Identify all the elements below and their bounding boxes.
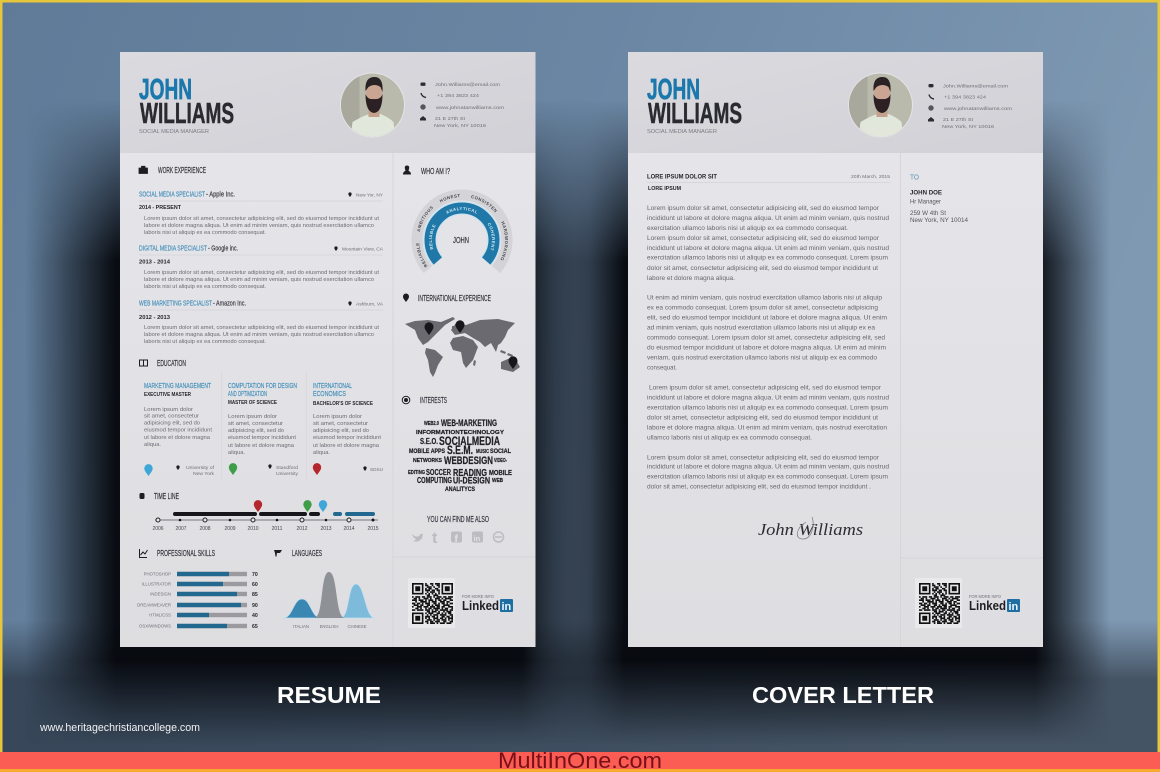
section: education: eiusmod tempor incididunt	[313, 435, 382, 441]
section: timeline: 2009	[224, 526, 236, 532]
name heading: JOHN	[139, 74, 192, 106]
section: professional skills: 65	[252, 624, 258, 630]
letter heading	[647, 174, 890, 192]
section: timeline: 2008	[199, 526, 211, 532]
radial trait diagram: HONEST	[440, 194, 460, 202]
section: work experience: labore et dolore magna aliqua. Ut enim ad minim veniam, quis nostrud exercitation ullamco	[144, 332, 374, 338]
addressee block: 259 W 4th St	[910, 211, 946, 217]
social icons: in	[474, 534, 481, 543]
section: timeline: 2015	[367, 526, 379, 532]
icon: watch	[140, 493, 144, 499]
section: professional skills: OSX/WINDOWS	[139, 624, 171, 628]
section: timeline: 2014	[343, 526, 355, 532]
section: work experience: - Google inc.	[208, 244, 238, 252]
addressee block: New York, NY 10014	[910, 218, 969, 224]
letter body text: elit, sed do eiusmod tempor incididunt ut labore et dolore magna aliqua. Ut enim	[647, 314, 887, 322]
letter body text: Lorem ipsum dolor sit amet, consectetur adipisicing elit, sed do eiusmod tempor	[647, 454, 879, 462]
name heading: JOHN	[647, 74, 700, 106]
word cloud: COMPUTING	[417, 476, 452, 485]
QR code and LinkedIn: FOR MORE INFO	[969, 594, 1002, 599]
section: education: New York	[193, 471, 215, 476]
section: education: ut labore et dolore magna	[313, 443, 379, 449]
word cloud: SOCIAL	[490, 449, 511, 455]
section: education: eiusmod tempor incididunt	[144, 428, 213, 434]
section: work experience: SOCIAL MEDIA SPECIALIST	[139, 190, 205, 198]
letter body text: dolor sit amet, consectetur adipisicing elit, sed do eiusmod tempor incididunt ut	[647, 265, 878, 272]
QR code and LinkedIn: in	[1008, 601, 1019, 613]
name heading: WILLIAMS	[140, 98, 234, 130]
contact details	[928, 84, 1012, 129]
radial trait diagram: CONSISTEN	[471, 195, 498, 212]
contact details	[420, 82, 504, 128]
section: timeline: 2012	[296, 526, 308, 532]
social links: YOU CAN FIND ME ALSO	[427, 515, 489, 524]
section: work experience: - Amazon Inc.	[213, 298, 246, 308]
job title: SOCIAL MEDIA MANAGER	[647, 129, 717, 135]
job title: SOCIAL MEDIA MANAGER	[139, 129, 209, 135]
contact details: New York, NY 10016	[942, 124, 995, 129]
section: work experience: 2012 - 2013	[139, 315, 170, 321]
section: education: University of	[186, 465, 215, 470]
icon: briefcase	[139, 166, 148, 174]
section: work experience: 2013 - 2014	[139, 260, 170, 266]
section: work experience: Lorem ipsum dolor sit amet, consectetur adipisicing elit, sed do eiusmod tempor incididunt ut	[144, 325, 380, 331]
letter body text: ad minim veniam, quis nostrud exercitation ullamco laboris nisi ut aliquip ex ea	[647, 324, 876, 332]
section: professional skills: PROFESSIONAL SKILLS	[157, 549, 215, 558]
word cloud: WEBDESIGN	[444, 455, 493, 467]
section: work experience	[139, 166, 384, 345]
radial trait diagram: COHERENT	[488, 223, 495, 251]
QR code and LinkedIn	[915, 578, 1020, 628]
section: professional skills: DREAMWEAVER	[137, 602, 171, 608]
word cloud: SOCIALMEDIA	[439, 434, 500, 448]
word cloud	[408, 418, 512, 493]
name heading: WILLIAMS	[648, 98, 742, 130]
addressee block: Hr Manager	[910, 198, 942, 206]
section: work experience: 2014 - PRESENT	[139, 205, 182, 211]
portrait photo	[340, 72, 406, 138]
social icons: f	[454, 534, 458, 545]
section: who am I: WHO AM I?	[421, 167, 450, 176]
section: professional skills: HTML/CSS	[149, 612, 171, 618]
section: education: sit amet, consectetur	[313, 421, 368, 427]
letter body text: exercitation ullamco laboris nisi ut aliquip ex ea commodo consequat.	[647, 225, 848, 232]
radial trait diagram: RELIABLE	[429, 224, 436, 250]
social icons: t	[432, 530, 438, 547]
letter body text: Lorem ipsum dolor sit amet, consectetur adipisicing elit, sed do eiusmod tempor	[647, 235, 879, 242]
section: timeline: 2010	[247, 526, 259, 532]
section: education: EXECUTIVE MASTER	[144, 392, 191, 398]
letter body text: exercitation ullamco laboris nisi ut aliquip ex ea commodo consequat. Lorem ipsum	[647, 404, 888, 412]
section: work experience: DIGITAL MEDIA SPECIALIST	[139, 244, 207, 252]
addressee block: JOHN DOE	[910, 190, 943, 196]
section: work experience: New Yor, NY	[356, 192, 383, 198]
section: languages: CHINESE	[347, 624, 367, 629]
icon: flag	[274, 550, 282, 556]
section: professional skills: 40	[252, 613, 258, 619]
section: work experience: laboris nisi ut aliquip ex ea commodo consequat.	[144, 284, 266, 290]
section: work experience: Lorem ipsum dolor sit amet, consectetur adipisicing elit, sed do eiusmod tempor incididunt ut	[144, 270, 380, 276]
letter heading: 20th March, 2015	[851, 174, 890, 179]
website watermark: www.heritagechristiancollege.com	[39, 722, 200, 734]
word cloud: INFORMATIONTECHNOLOGY	[416, 430, 504, 436]
letter body text	[647, 205, 889, 490]
section: languages: ENGLISH	[320, 624, 338, 629]
section: education: sit amet, consectetur	[228, 421, 283, 427]
letter body text: Lorem ipsum dolor sit amet, consectetur adipisicing elit, sed do eiusmod tempor	[647, 205, 879, 212]
section: education: adipisicing elit, sed do	[144, 420, 200, 426]
radial trait diagram: JOHN	[453, 236, 469, 245]
letter body text: veniam, quis nostrud exercitation ullamco laboris nisi ut aliquip ex ea commodo	[647, 354, 878, 362]
section: education: Standford	[276, 465, 298, 470]
QR code and LinkedIn: FOR MORE INFO	[462, 594, 495, 599]
letter body text: exercitation ullamco laboris nisi ut aliquip ex ea commodo consequat. Lorem ipsum	[647, 254, 888, 262]
letter body text: labore et dolore magna aliqua.	[647, 275, 735, 282]
section: work experience: WORK EXPERIENCE	[158, 166, 206, 175]
cover header band	[628, 52, 1043, 153]
section: international experience: INTERNATIONAL EXPERIENCE	[418, 294, 491, 303]
section: work experience: Mountain View, CA	[342, 246, 384, 252]
section: education: ut labore et dolore magna	[144, 435, 210, 441]
section: education: University	[276, 471, 299, 476]
letter body text: incididunt ut labore et dolore magna aliqua. Ut enim ad minim veniam, quis nostrud	[647, 464, 889, 470]
panel: cover letter page	[628, 52, 1043, 647]
section: interests	[402, 396, 512, 493]
section: professional skills: ILLUSTRATOR	[142, 582, 171, 586]
section: education: ECONOMICS	[313, 389, 346, 398]
name heading	[139, 74, 234, 130]
section: timeline: 2007	[175, 526, 187, 532]
QR code and LinkedIn: Linked	[462, 599, 499, 613]
word cloud: VIDEO-	[494, 458, 507, 464]
letter body text: labore et dolore magna aliqua. Ut enim ad minim veniam, quis nostrud exercitation	[647, 424, 887, 432]
section: professional skills: 85	[252, 592, 258, 598]
word cloud: MOBILE	[489, 470, 512, 477]
word cloud: ANALITYCS	[445, 487, 475, 493]
section: education: adipisicing elit, sed do	[313, 428, 369, 434]
section: timeline: 2013	[320, 526, 332, 532]
contact details: John.Williams@email.com	[435, 82, 500, 87]
letter body text: ullamco laboris nisi ut aliquip ex ea commodo consequat.	[647, 434, 812, 442]
section: education: adipisicing elit, sed do	[228, 428, 284, 434]
section: languages: LANGUAGES	[292, 549, 322, 558]
radial trait diagram	[412, 190, 512, 273]
icon: person	[403, 166, 411, 174]
letter body text: consequat.	[647, 364, 677, 372]
section: education: MASTER OF SCIENCE	[228, 400, 277, 406]
word cloud: EDITING	[408, 470, 425, 476]
section: education: EDUCATION	[157, 359, 186, 368]
word cloud: MUSIC	[476, 449, 489, 455]
section: interests: INTERESTS	[420, 396, 447, 405]
name heading	[647, 74, 742, 130]
addressee block	[910, 174, 969, 224]
section: languages	[274, 549, 375, 629]
section: work experience: - Apple Inc.	[206, 190, 235, 198]
icon: chart	[140, 549, 148, 558]
section: education: SDSU	[370, 467, 383, 472]
word cloud: UI-DESIGN	[453, 476, 490, 486]
section: education: Lorem ipsum dolor	[228, 414, 277, 420]
section: professional skills: 90	[252, 603, 258, 609]
section: timeline: 2006	[152, 526, 164, 532]
section: education: Lorem ipsum dolor	[313, 414, 362, 420]
section: education: sit amet, consectetur	[144, 414, 199, 420]
section: timeline	[140, 492, 379, 532]
letter body text: Ut enim ad minim veniam, quis nostrud exercitation ullamco laboris nisi ut aliquip	[647, 294, 883, 302]
letter body text: ex ea commodo consequat. Lorem ipsum dolor sit amet, consectetur adipisicing	[647, 304, 878, 312]
section: who am I	[403, 166, 512, 273]
section: work experience: labore et dolore magna aliqua. Ut enim ad minim veniam, quis nostrud exercitation ullamco	[144, 223, 374, 229]
letter heading: LORE IPSUM DOLOR SIT	[647, 174, 717, 180]
section: education: INTERNATIONAL	[313, 381, 352, 390]
letter body text: dolor sit amet, consectetur adipisicing elit, sed do eiusmod tempor incididunt ut	[647, 414, 878, 422]
word cloud: WEB2.0	[424, 421, 439, 427]
caption: cover letter: COVER LETTER	[752, 682, 934, 708]
resume header band	[120, 52, 536, 153]
section: work experience: WEB MARKETING SPECIALIST	[139, 298, 212, 308]
word cloud: MOBILE APPS	[409, 448, 446, 455]
contact details: +1 394 3823 424	[944, 94, 987, 100]
section: timeline: TIME LINE	[154, 492, 179, 501]
section: education: AND OPTIMIZATION	[228, 389, 267, 398]
letter body text: do eiusmod tempor incididunt ut labore et dolore magna aliqua. Ut enim ad minim	[647, 344, 886, 352]
section: education	[140, 359, 383, 482]
panel: resume page	[120, 52, 536, 647]
section: education: aliqua.	[144, 442, 161, 448]
radial trait diagram: AMBITIOUS	[417, 206, 433, 232]
contact details: 21 E 27th St	[943, 117, 974, 122]
section: work experience: Ashburn, VA	[356, 302, 384, 306]
QR code and LinkedIn: in	[502, 601, 512, 613]
section: work experience: labore et dolore magna aliqua. Ut enim ad minim veniam, quis nostrud exercitation ullamco	[144, 277, 374, 283]
social links	[412, 515, 504, 547]
QR code and LinkedIn: Linked	[969, 599, 1006, 613]
section: education: COMPUTATION FOR DESIGN	[228, 381, 297, 390]
letter body text: incididunt ut labore et dolore magna aliqua. Ut enim ad minim veniam, quis nostrud	[647, 394, 889, 402]
section: professional skills	[137, 549, 258, 630]
contact details: 21 E 27th St	[435, 116, 466, 121]
section: professional skills: 60	[252, 582, 258, 588]
caption: resume: RESUME	[277, 682, 381, 708]
word cloud: NETWORKS	[413, 458, 442, 464]
section: international experience	[403, 294, 520, 377]
social icons	[412, 530, 504, 547]
section: work experience: Lorem ipsum dolor sit amet, consectetur adipisicing elit, sed do eiusmod tempor incididunt ut	[144, 216, 380, 222]
section: education: aliqua.	[228, 450, 245, 456]
signature: John Williams	[758, 520, 863, 539]
section: education: aliqua.	[313, 450, 330, 456]
section: education: BACHELOR'S OF SCIENCE	[313, 401, 373, 407]
section: work experience: laboris nisi ut aliquip ex ea commodo consequat.	[144, 339, 266, 345]
world map	[405, 317, 520, 377]
contact details: www.johnatanwilliams.com	[944, 106, 1012, 111]
section: professional skills: INDESIGN	[150, 592, 171, 596]
section: professional skills: 70	[252, 572, 258, 578]
word cloud: S.E.M.	[447, 443, 473, 457]
word cloud: SOCCER	[426, 468, 451, 477]
radial trait diagram: ANALYTICAL	[446, 207, 477, 214]
letter body text: dolor sit amet, consectetur adipisicing elit, sed do eiusmod tempor incididunt .	[647, 484, 871, 490]
section: education: ut labore et dolore magna	[228, 443, 294, 449]
area chart	[283, 599, 321, 618]
section: education: MARKETING MANAGEMENT	[144, 381, 211, 390]
radial trait diagram: RELIABLE	[416, 243, 428, 268]
icon: location pin	[403, 294, 409, 302]
letter heading: LORE IPSUM	[648, 186, 681, 192]
section: languages: ITALIAN	[293, 624, 309, 629]
radial trait diagram: HARDWORKING	[500, 221, 508, 260]
QR code and LinkedIn	[408, 578, 513, 628]
contact details: +1 394 3823 424	[437, 93, 480, 98]
addressee block: TO	[910, 174, 920, 182]
word cloud: S.E.O.	[420, 437, 438, 446]
contact details: John.Williams@email.com	[943, 84, 1008, 88]
contact details: New York, NY 10016	[434, 123, 487, 128]
bottom banner	[0, 748, 1160, 772]
section: timeline: 2011	[272, 526, 283, 532]
letter body text: commodo consequat. Lorem ipsum dolor sit amet, consectetur adipisicing elit, sed	[647, 334, 885, 342]
word cloud: WEB-MARKETING	[441, 418, 497, 428]
icon: book	[140, 360, 148, 366]
letter body text: Lorem ipsum dolor sit amet, consectetur adipisicing elit, sed do eiusmod tempor	[649, 384, 881, 392]
letter body text: incididunt ut labore et dolore magna aliqua. Ut enim ad minim veniam, quis nostrud	[647, 215, 889, 222]
letter body text: exercitation ullamco laboris nisi ut aliquip ex ea commodo consequat. Lorem ipsum	[647, 474, 888, 480]
section: professional skills: PHOTOSHOP	[144, 572, 171, 576]
icon: star badge	[402, 396, 410, 404]
portrait photo	[848, 72, 914, 138]
section: work experience: laboris nisi ut aliquip ex ea commodo consequat.	[144, 230, 266, 236]
contact details: www.johnatanwilliams.com	[436, 105, 504, 110]
letter body text: incididunt ut labore et dolore magna aliqua. Ut enim ad minim veniam, quis nostrud	[647, 245, 889, 252]
word cloud: WEB	[492, 478, 503, 484]
section: education: Lorem ipsum dolor	[144, 407, 193, 413]
section: education: eiusmod tempor incididunt	[228, 435, 297, 441]
word cloud: READING	[453, 468, 487, 479]
